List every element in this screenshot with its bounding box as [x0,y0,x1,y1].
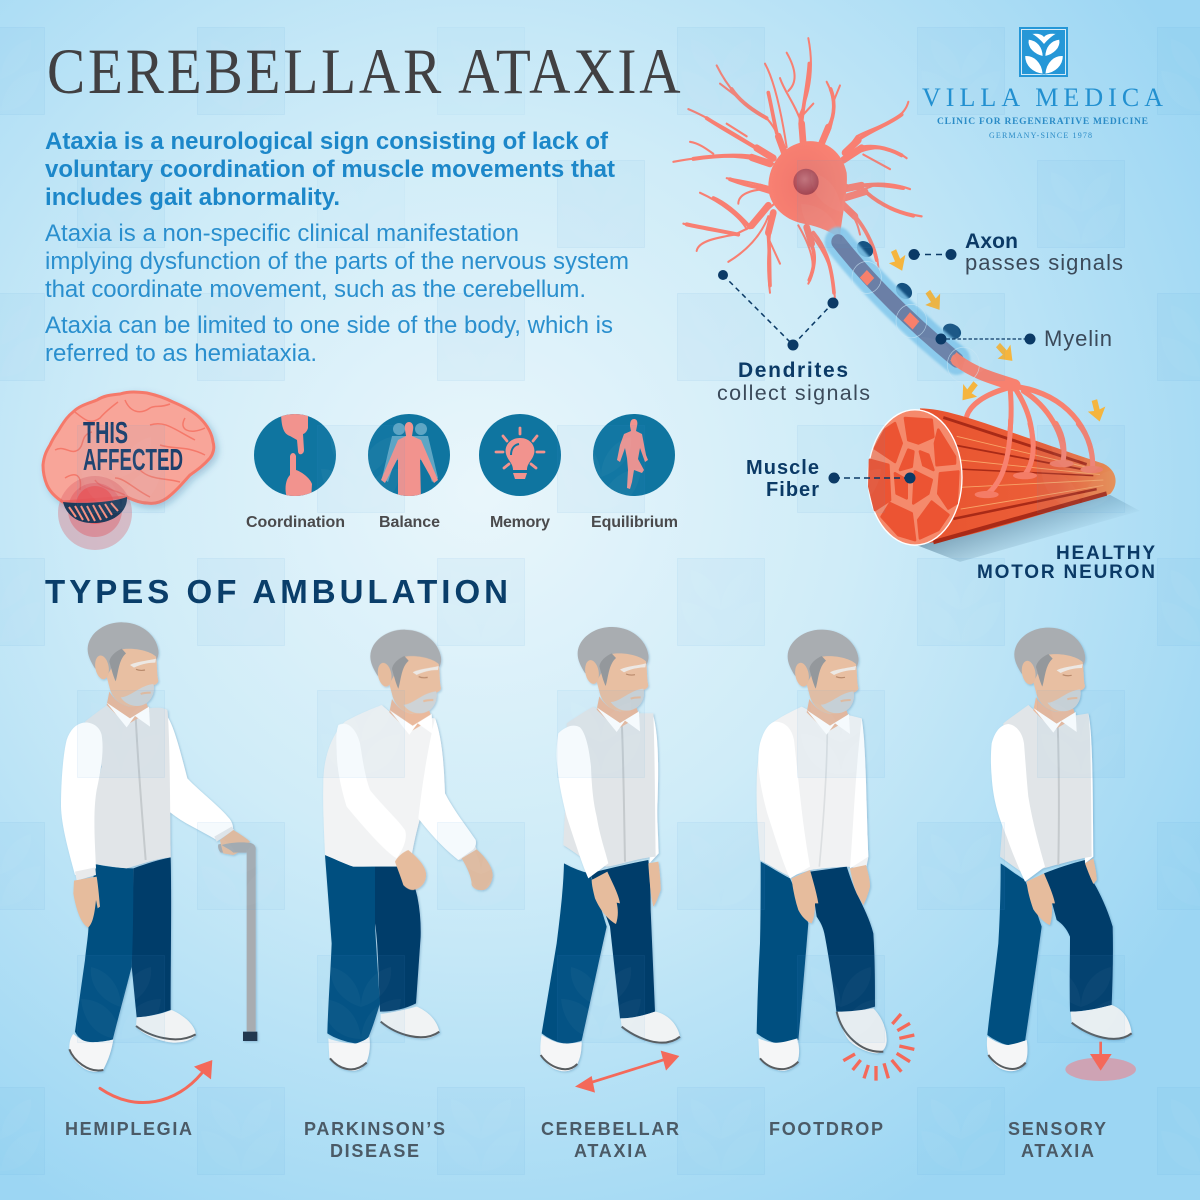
label: cerebellar ataxia: ATAXIA [574,1141,647,1161]
label: Parkinson's disease: PARKINSON’S [304,1119,445,1139]
cane handle over hand [222,842,256,853]
muscle fiber bundle [868,408,1116,545]
caption: healthy motor neuron [977,543,1155,583]
far arm and hand [1083,713,1097,884]
shoes [758,1008,887,1071]
label: Parkinson's disease: DISEASE [330,1141,419,1161]
text block: hemiataxia: referred to as hemiataxia. [45,340,317,367]
zipper [136,717,146,860]
icon labels: Equilibrium [591,514,678,531]
neuron callout: muscle fiber: Muscle [746,457,819,479]
person: cerebellar ataxia [540,627,680,1071]
text block: manifestation: Ataxia is a non-specific clinical manifestation [45,220,519,247]
shoes [69,1010,196,1072]
arrow: hemiplegia swing [100,1060,212,1102]
brain caption: AFFECTED [83,442,183,477]
logo since line: GERMANY-SINCE 1978 [989,131,1092,140]
icon labels [246,514,678,531]
icon: coordination [254,410,336,500]
caption: healthy motor neuron: MOTOR NEURON [977,562,1155,583]
text block: definition [45,128,615,211]
text block: hemiataxia: Ataxia can be limited to one side of the body, which is [45,312,613,339]
trousers [75,857,171,1042]
near arm and hand [991,724,1055,925]
near arm and hand [557,726,620,924]
muscle shadow [917,495,1140,562]
icon labels: Coordination [246,514,345,531]
label: cerebellar ataxia [541,1119,679,1161]
person: sensory ataxia [987,628,1132,1071]
brain caption: THIS [83,415,128,450]
near arm and hand [61,722,103,927]
person: footdrop [757,630,887,1071]
head [88,622,158,727]
red highlight circles [58,476,132,550]
far arm and hand [648,713,661,907]
vest [1000,705,1092,873]
icon: sensory ataxia stamp [1065,1042,1136,1081]
neuron callout: dendrites [717,270,870,405]
brain [43,392,214,503]
near arm and hand [336,724,426,890]
neuron callout: axon: Axon [965,230,1018,253]
heading: types of ambulation: TYPES OF AMBULATION [45,573,508,610]
logo mark [1019,27,1068,77]
far arm and hand [167,717,250,855]
head [1014,628,1085,733]
arrows: signal direction [885,246,1108,424]
text block: definition: voluntary coordination of muscle movements that [45,156,615,183]
icon: balance [368,414,450,500]
nucleus [793,169,819,195]
icon: footdrop impact rays [843,1014,914,1081]
myelin bumps [854,238,963,342]
vest [85,705,171,868]
person: Parkinson's disease [323,630,493,1071]
neuron dendrites [673,38,922,300]
person: hemiplegia [61,622,257,1072]
icon labels: Balance [379,514,440,531]
neuron callout: dendrites: collect signals [717,381,870,405]
text block: manifestation [45,220,629,303]
far hand [457,845,493,890]
shoes [540,1012,680,1071]
icon labels: Memory [490,514,550,531]
trousers [987,860,1113,1045]
cane [218,842,257,1041]
neuron callout: myelin: Myelin [1044,326,1112,351]
zipper [622,720,625,862]
neuron cell body [768,141,847,238]
label: cerebellar ataxia: CEREBELLAR [541,1119,679,1139]
shoes [987,1005,1132,1071]
logo wordmark: VILLA MEDICA [922,83,1163,112]
head [578,627,648,732]
label: sensory ataxia [1008,1119,1106,1161]
icon: equilibrium [593,414,675,496]
logo tagline: CLINIC FOR REGENERATIVE MEDICINE [937,117,1148,127]
neuron callout: axon: passes signals [965,250,1123,275]
zipper [1058,723,1059,865]
shirt [757,707,868,877]
shoes [328,1007,439,1071]
text block: manifestation: that coordinate movement, such as the cerebellum. [45,276,586,303]
text block: definition: Ataxia is a neurological sign consisting of lack of [45,128,609,155]
neuron callout: muscle fiber [746,457,916,501]
logo: Villa Medica [922,27,1163,140]
axon with myelin sheath [838,242,1015,385]
trousers [757,862,875,1043]
label: sensory ataxia: SENSORY [1008,1119,1106,1139]
title: CEREBELLAR ATAXIA [47,36,681,108]
label: Parkinson's disease [304,1119,445,1161]
neuron callout: myelin [936,326,1112,351]
trousers [325,855,421,1043]
text block: hemiataxia [45,312,613,367]
label: sensory ataxia: ATAXIA [1021,1141,1094,1161]
arrow: cerebellar ataxia wide gait [575,1051,679,1093]
cerebellum [63,497,127,523]
illustration: healthy motor neuron [673,38,1140,562]
text block: manifestation: implying dysfunction of the parts of the nervous system [45,248,629,275]
brain caption [83,415,183,477]
neuron callout: muscle fiber: Fiber [766,479,819,501]
neuron callout: dendrites: Dendrites [738,359,848,382]
muscle cross-section [868,410,962,545]
text block: definition: includes gait abnormality. [45,184,340,211]
axon terminal branches [967,387,1093,495]
near arm and hand [758,722,818,923]
neuron callout: axon [908,230,1123,275]
trousers [542,860,655,1044]
head [370,630,441,735]
shirt [323,705,444,867]
icon: memory [479,414,561,496]
zipper [819,723,827,867]
head [788,630,858,735]
vest [563,707,656,867]
far sleeve [418,718,476,860]
nerve endings on muscle [987,420,1093,495]
far arm and hand [850,718,870,905]
label: hemiplegia: HEMIPLEGIA [65,1119,192,1139]
label: footdrop: FOOTDROP [769,1119,883,1139]
icon: brain with affected cerebellum [43,392,214,550]
caption: healthy motor neuron: HEALTHY [1056,543,1155,564]
